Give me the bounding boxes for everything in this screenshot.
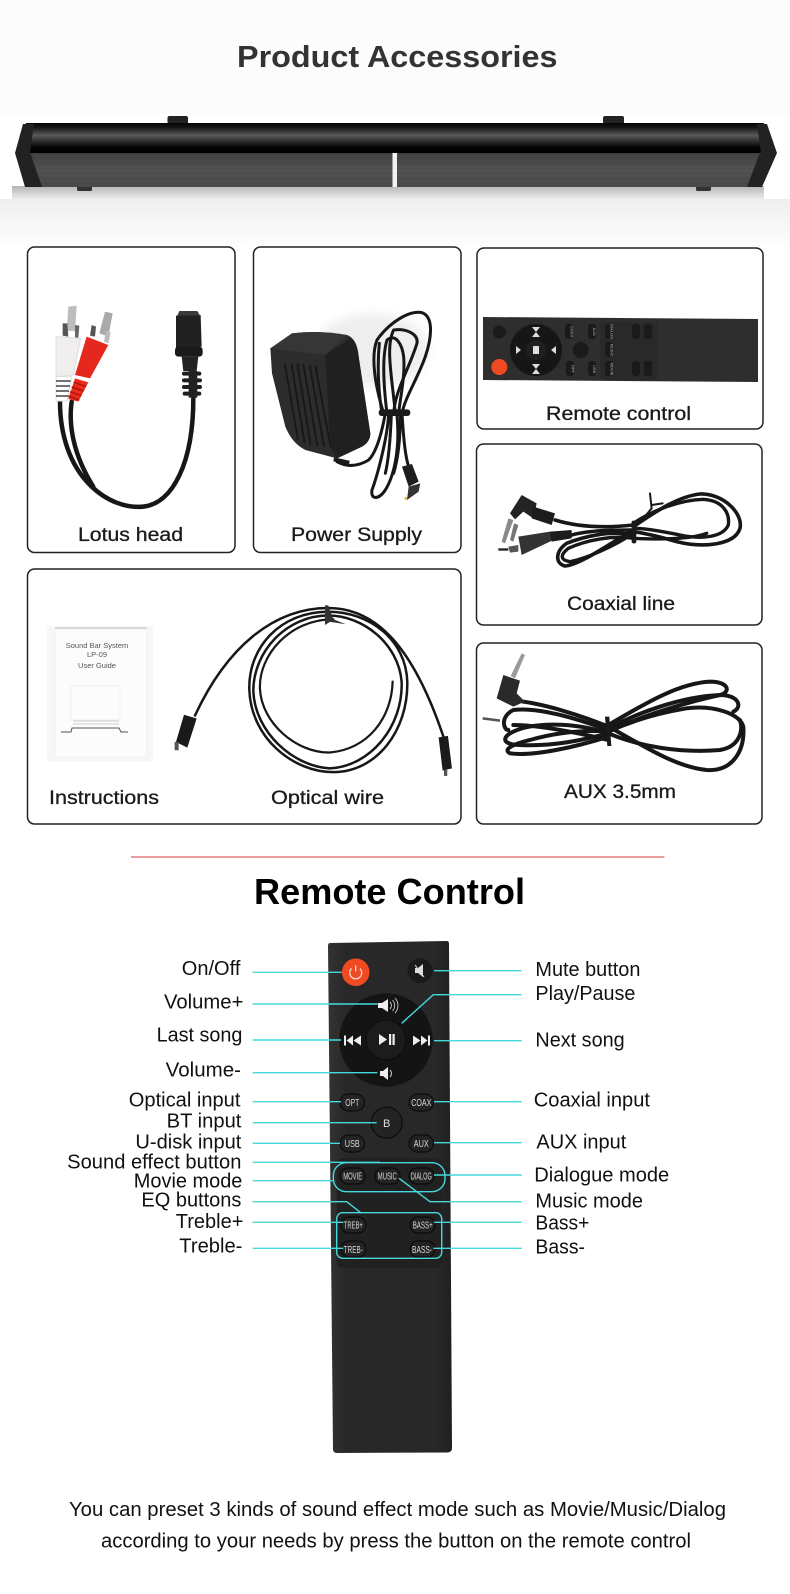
- icon: volume down: [380, 1067, 391, 1080]
- icon: instruction booklet: Sound Bar System: [66, 641, 128, 650]
- icon: remote control horizontal: USB: [592, 365, 597, 373]
- remote control product: [328, 941, 452, 1453]
- left callout labels: U-disk input: [135, 1131, 242, 1153]
- left callout labels: Optical input: [129, 1090, 241, 1112]
- right callout labels: Bass+: [535, 1212, 589, 1234]
- input buttons: [340, 1094, 434, 1152]
- left callout labels: Movie mode: [134, 1170, 242, 1192]
- input buttons: OPT: [345, 1098, 359, 1109]
- panel: AUX 3.5mm: [476, 643, 762, 824]
- right callout labels: Next song: [535, 1030, 625, 1052]
- icon: previous song: [344, 1036, 361, 1046]
- left callout labels: BT input: [167, 1110, 242, 1132]
- footer description: according to your needs by press the button on the remote control: [101, 1530, 691, 1552]
- cyan callout lines: [253, 971, 522, 1258]
- right callout labels: Coaxial input: [534, 1090, 650, 1112]
- sound effect and EQ buttons: TREB+: [344, 1220, 363, 1232]
- title: Product Accessories: Product Accessories: [237, 40, 558, 74]
- icon: play pause: [379, 1034, 395, 1045]
- right callout labels: Music mode: [535, 1191, 643, 1213]
- EQ and sound effect dark panel: [337, 1158, 442, 1268]
- icon: remote control horizontal: MOVIE: [610, 363, 614, 376]
- icon: coaxial cable: [498, 493, 740, 566]
- left callout labels: Treble+: [176, 1211, 243, 1233]
- left callout labels: Treble-: [179, 1236, 242, 1258]
- label: Remote control: Remote control: [546, 404, 691, 425]
- sound effect and EQ buttons: DIALOG: [411, 1172, 432, 1182]
- left callout labels: EQ buttons: [141, 1190, 241, 1212]
- footer description: [69, 1499, 726, 1552]
- label: Power Supply: Power Supply: [291, 525, 423, 546]
- label: Lotus head: Lotus head: [78, 525, 183, 546]
- left callout labels: Sound effect button: [67, 1151, 241, 1173]
- left callout labels: On/Off: [182, 958, 241, 980]
- left callout labels: [67, 958, 243, 1258]
- left callout labels: Last song: [157, 1025, 242, 1047]
- icon: remote control horizontal: OPT: [570, 365, 576, 374]
- icon: optical cable: [175, 605, 452, 776]
- icon: remote control horizontal: DIALOG: [610, 324, 614, 339]
- divider line: [131, 856, 664, 858]
- icon: remote control horizontal: COAX: [570, 326, 574, 338]
- panel: Instructions and Optical wire: [28, 569, 461, 824]
- icon: AUX cable: [483, 653, 743, 770]
- input buttons: COAX: [411, 1098, 432, 1109]
- panel: Remote control accessory: [477, 248, 763, 429]
- footer description: You can preset 3 kinds of sound effect mode such as Movie/Music/Dialog: [69, 1499, 726, 1521]
- icon: volume up: [378, 998, 398, 1013]
- icon: next song: [413, 1036, 430, 1046]
- sound effect and EQ buttons: MUSIC: [378, 1172, 397, 1182]
- icon: remote control horizontal: AUX: [592, 328, 597, 336]
- left callout labels: Volume+: [164, 991, 243, 1013]
- sound effect and EQ buttons: BASS+: [413, 1220, 433, 1232]
- sound effect and EQ buttons: MOVIE: [343, 1172, 362, 1182]
- right callout labels: Play/Pause: [535, 983, 635, 1005]
- sound effect and EQ buttons: BASS-: [412, 1245, 432, 1256]
- button: mute: [408, 958, 432, 983]
- input buttons: USB: [345, 1139, 360, 1150]
- button: power: [342, 958, 370, 986]
- icon: RCA to jack cable: [56, 306, 203, 507]
- left callout labels: Volume-: [166, 1060, 241, 1082]
- sound effect and EQ buttons: TREB-: [344, 1245, 363, 1256]
- icon: remote control horizontal: [483, 317, 758, 382]
- sound effect and EQ buttons: [340, 1168, 435, 1257]
- icon: instruction booklet: [47, 626, 153, 762]
- panel: Coaxial line: [476, 444, 762, 625]
- icon: instruction booklet: LP-09: [87, 650, 107, 659]
- icon: instruction booklet: User Guide: [78, 661, 116, 670]
- input buttons: AUX: [414, 1139, 429, 1150]
- control dial: [339, 993, 433, 1087]
- panel: Lotus head: [28, 247, 235, 552]
- title: Remote Control: Remote Control: [254, 871, 525, 912]
- sound bar product image: [12, 116, 777, 199]
- label: Optical wire: Optical wire: [271, 788, 384, 809]
- label: AUX 3.5mm: AUX 3.5mm: [564, 782, 676, 803]
- right callout labels: Bass-: [535, 1236, 585, 1258]
- right callout labels: Mute button: [535, 959, 640, 981]
- right callout labels: Dialogue mode: [534, 1165, 669, 1187]
- right callout labels: AUX input: [536, 1131, 627, 1153]
- panel: Power Supply: [254, 247, 461, 552]
- label: Instructions: Instructions: [49, 788, 159, 809]
- icon: remote control horizontal: MUSIC: [610, 344, 614, 357]
- input buttons: B: [383, 1118, 390, 1130]
- icon: power adapter: [270, 312, 431, 500]
- right callout labels: [534, 959, 669, 1258]
- label: Coaxial line: Coaxial line: [567, 594, 675, 615]
